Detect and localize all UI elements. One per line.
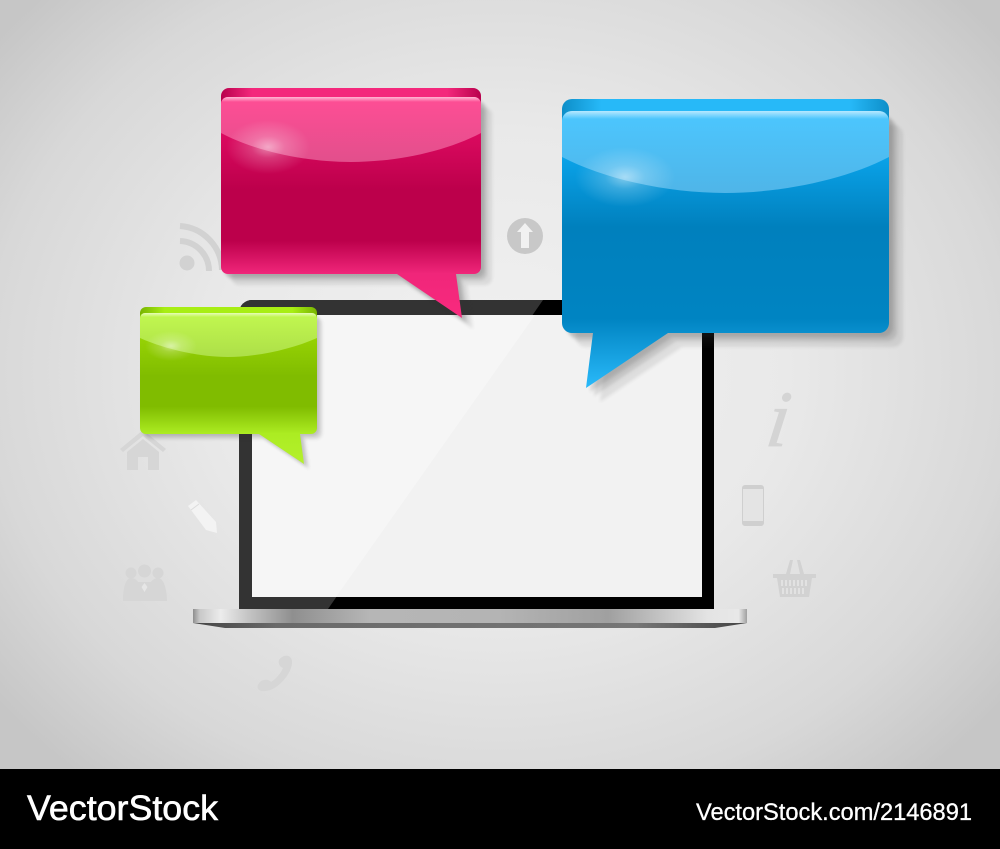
laptop — [193, 300, 747, 628]
frame grey reflection — [239, 300, 543, 609]
icon: home — [120, 430, 166, 470]
laptop base underside — [193, 623, 747, 628]
watermark logo: VectorStock — [27, 789, 219, 828]
laptop frame — [239, 300, 714, 609]
green body — [140, 313, 317, 464]
pink shadow — [224, 100, 484, 321]
icon: smartphone — [742, 485, 764, 526]
icon: upload arrow — [507, 218, 543, 254]
icon: info: i — [762, 375, 796, 464]
blue shadow mid — [570, 119, 897, 396]
watermark url: VectorStock.com/2146891 — [696, 799, 972, 826]
screen reflection — [252, 315, 535, 597]
speech bubble: pink — [221, 88, 492, 329]
speech bubble: blue — [562, 99, 903, 402]
screen — [252, 315, 702, 597]
icon: people — [123, 564, 167, 601]
green shadow — [142, 315, 319, 466]
pink shadow outer — [232, 108, 492, 329]
icon: telephone — [258, 656, 292, 691]
green back band — [140, 307, 317, 330]
watermark band — [0, 769, 1000, 849]
pink body — [221, 97, 481, 318]
blue shadow — [566, 115, 893, 392]
blue body — [562, 111, 889, 388]
blue gloss — [562, 111, 889, 207]
blue shadow outer — [576, 125, 903, 402]
laptop base — [193, 609, 747, 623]
green gloss — [140, 313, 317, 361]
icon: pencil — [188, 500, 217, 533]
pink shadow mid — [227, 103, 487, 324]
icon: shopping basket — [773, 560, 816, 597]
pink back band — [221, 88, 481, 120]
pink gloss — [221, 97, 481, 174]
speech bubble: green — [140, 307, 322, 469]
icon: rss — [180, 226, 222, 271]
blue back band — [562, 99, 889, 135]
green shadow outer — [145, 318, 322, 469]
